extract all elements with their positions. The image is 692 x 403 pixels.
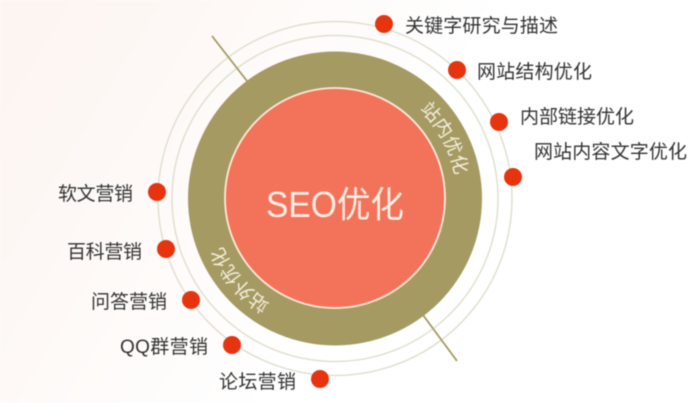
divider line: upper left <box>212 36 247 81</box>
dot: internal links <box>490 113 508 131</box>
dot: keyword research <box>375 15 393 33</box>
ring label: off-site optimisation: 站外优化 <box>210 246 270 314</box>
label: keyword research: 关键字研究与描述 <box>405 15 558 37</box>
dot: content <box>504 168 522 186</box>
right-side items <box>375 15 687 186</box>
orbit rings <box>158 22 512 376</box>
dot: forum marketing <box>311 370 329 388</box>
label: site structure: 网站结构优化 <box>477 61 592 83</box>
dot: Q&A marketing <box>182 291 200 309</box>
label: content: 网站内容文字优化 <box>534 141 687 163</box>
divider line: lower right <box>423 315 457 361</box>
left-side items <box>58 183 329 393</box>
label: forum marketing: 论坛营销 <box>219 371 296 393</box>
centre title: SEO优化 <box>266 184 404 225</box>
label: internal links: 内部链接优化 <box>520 106 634 128</box>
olive ring <box>188 52 482 346</box>
label: QQ group marketing: QQ群营销 <box>120 336 208 358</box>
label: soft article marketing: 软文营销 <box>58 183 133 205</box>
dot: encyclopedia marketing <box>157 240 175 258</box>
label: Q&A marketing: 问答营销 <box>91 291 167 313</box>
centre circle <box>225 88 445 308</box>
ring label: on-site optimisation: 站内优化 <box>420 101 470 175</box>
label: encyclopedia marketing: 百科营销 <box>67 241 142 263</box>
dot: site structure <box>448 61 466 79</box>
dot: soft article marketing <box>148 183 166 201</box>
dot: QQ group marketing <box>223 336 241 354</box>
